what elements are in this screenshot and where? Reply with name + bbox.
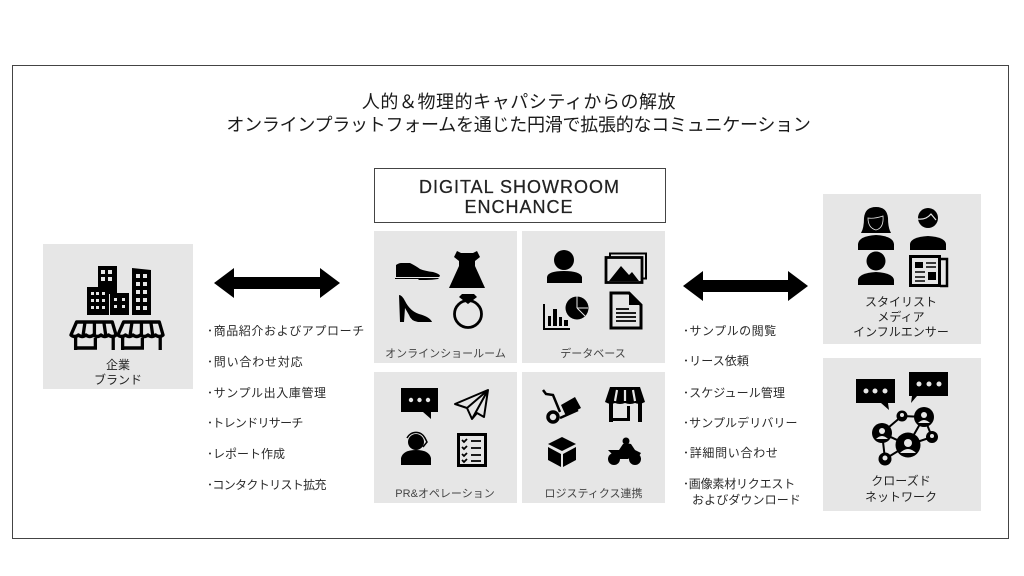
panel: PR & operations [374, 372, 517, 503]
icon: woman [858, 207, 894, 250]
icon: ring [454, 294, 482, 328]
label: closed network: クローズド [871, 473, 931, 488]
list: company tasks: ･レポート作成 [207, 447, 285, 461]
label: company / brand: ブランド [94, 372, 142, 387]
icon: charts [543, 296, 588, 330]
heading box: Digital Showroom Enchance: DIGITAL SHOWROOM [419, 177, 620, 197]
icon: speech bubble [401, 388, 438, 419]
panel: database [522, 231, 665, 363]
icon: high heel [399, 295, 432, 322]
list: company tasks: ･サンプル出入庫管理 [207, 385, 327, 400]
list: stylist tasks [683, 324, 801, 507]
list: stylist tasks: ･サンプルの閲覧 [683, 324, 777, 338]
icon: paper plane [455, 390, 488, 419]
list: stylist tasks: ･詳細問い合わせ [683, 445, 779, 460]
label: stylists / media / influencers: スタイリスト [865, 295, 937, 309]
icon: two shops [71, 322, 163, 350]
heading box: Digital Showroom Enchance [374, 168, 666, 222]
list: company tasks: ･コンタクトリスト拡充 [207, 478, 327, 492]
arrow: left double [214, 268, 340, 298]
list: stylist tasks: ･リース依頼 [683, 354, 749, 368]
panel: company / brand [43, 244, 193, 389]
title: オンラインプラットフォームを通じた円滑で拡張的なコミュニケーション [226, 115, 811, 135]
heading box: Digital Showroom Enchance: ENCHANCE [464, 197, 574, 217]
label: logistics: ロジスティクス連携 [544, 486, 643, 500]
label: database: データベース [560, 346, 626, 360]
label: online showroom: オンラインショールーム [385, 347, 506, 360]
panel: stylists / media / influencers [823, 194, 981, 344]
list: stylist tasks: およびダウンロード [692, 492, 801, 507]
icon: hand truck [543, 390, 581, 422]
list: company tasks: ･商品紹介およびアプローチ [207, 324, 365, 338]
icon: man [910, 208, 946, 250]
list: stylist tasks: ･画像素材リクエスト [683, 477, 795, 491]
icon: store [605, 387, 645, 422]
icon: speech bubbles [856, 372, 948, 410]
label: stylists / media / influencers [853, 295, 949, 339]
panel: logistics [522, 372, 665, 503]
label: PR & operations: PR&オペレーション [395, 487, 495, 500]
arrow: right double [683, 271, 808, 301]
icon: document [611, 293, 641, 328]
label: closed network: ネットワーク [865, 490, 937, 504]
label: closed network [865, 473, 937, 504]
title: 人的＆物理的キャパシティからの解放 [362, 92, 676, 112]
list: stylist tasks: ･サンプルデリバリー [683, 415, 798, 430]
list: company tasks [207, 324, 365, 492]
outer frame [12, 66, 1008, 538]
icon: checklist [458, 434, 486, 466]
icon: network [872, 407, 938, 466]
label: company / brand: 企業 [106, 358, 130, 372]
icon: buildings [87, 266, 151, 315]
icon: newspaper [910, 256, 947, 286]
label: stylists / media / influencers: メディア [877, 309, 925, 324]
icon: box [548, 437, 576, 467]
title [226, 92, 811, 135]
list: stylist tasks: ･スケジュール管理 [683, 385, 785, 400]
icon: photos [606, 254, 646, 282]
icon: person [547, 250, 582, 283]
icon: dress [449, 251, 485, 288]
panel: closed network [823, 358, 981, 511]
list: company tasks: ･問い合わせ対応 [207, 355, 303, 369]
label: company / brand [94, 358, 142, 387]
icon: person [858, 252, 894, 285]
list: company tasks: ･トレンドリサーチ [207, 416, 303, 430]
panel: online showroom [374, 231, 517, 363]
icon: support agent [401, 432, 431, 465]
label: stylists / media / influencers: インフルエンサー [853, 325, 949, 339]
icon: motorbike [608, 438, 641, 465]
icon: shoe [395, 263, 440, 280]
